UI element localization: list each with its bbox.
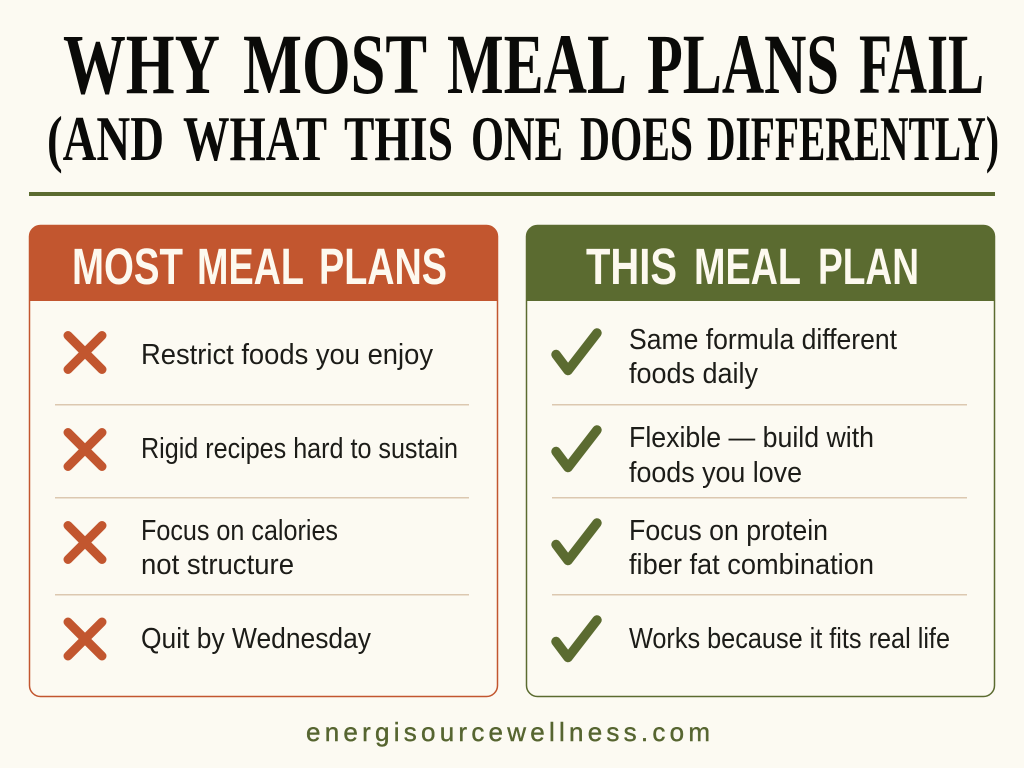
icon: check <box>556 523 597 560</box>
row: flexible <box>556 422 874 489</box>
header: most meal plans <box>29 225 498 301</box>
icon: cross <box>68 526 102 560</box>
row: flexible: Flexible — build with <box>629 422 874 454</box>
row: focus on protein: Focus on protein <box>629 515 828 547</box>
row: focus on protein <box>556 515 874 581</box>
footer url: energisourcewellness.com <box>306 717 710 747</box>
row: focus on calories: Focus on calories <box>141 515 338 547</box>
header: this meal plan: MEAL <box>694 238 801 295</box>
row: focus on calories: not structure <box>141 549 294 581</box>
row: flexible: foods you love <box>629 457 802 489</box>
title: MEAL <box>447 16 627 112</box>
row: rigid recipes <box>68 432 458 466</box>
row: same formula: Same formula different <box>629 324 897 356</box>
header: most meal plans: MOST <box>72 238 183 295</box>
row: works: Works because it fits real life <box>629 623 950 655</box>
title: THIS <box>344 103 453 174</box>
title: DOES <box>580 103 693 174</box>
row: focus on protein: fiber fat combination <box>629 549 874 581</box>
icon: cross <box>68 336 102 370</box>
row: rigid recipes: Rigid recipes hard to sustain <box>141 433 458 465</box>
icon: check <box>556 430 597 468</box>
header: this meal plan: THIS <box>586 238 677 295</box>
title: ONE <box>471 103 563 174</box>
panel: most meal plans <box>29 225 498 696</box>
row: works <box>556 620 950 658</box>
title: PLANS <box>647 16 839 112</box>
title: WHAT <box>183 103 327 174</box>
title <box>47 16 999 174</box>
header: most meal plans: PLANS <box>319 238 447 295</box>
row: focus on calories <box>68 515 338 581</box>
icon: check <box>556 620 597 658</box>
header: most meal plans: MEAL <box>197 238 304 295</box>
title: (AND <box>47 103 164 174</box>
row: restrict foods: Restrict foods you enjoy <box>141 339 433 371</box>
row: quit by wednesday: Quit by Wednesday <box>141 623 371 655</box>
panel: this meal plan <box>526 225 995 696</box>
title: WHY <box>63 16 220 112</box>
icon: cross <box>68 432 102 466</box>
row: same formula <box>556 324 897 390</box>
row: same formula: foods daily <box>629 358 758 390</box>
title: MOST <box>243 16 427 112</box>
icon: cross <box>68 622 102 656</box>
header: this meal plan: PLAN <box>818 238 919 295</box>
row: restrict foods <box>68 336 433 371</box>
icon: check <box>556 333 597 370</box>
header: this meal plan <box>526 225 995 301</box>
row: quit by wednesday <box>68 622 371 656</box>
